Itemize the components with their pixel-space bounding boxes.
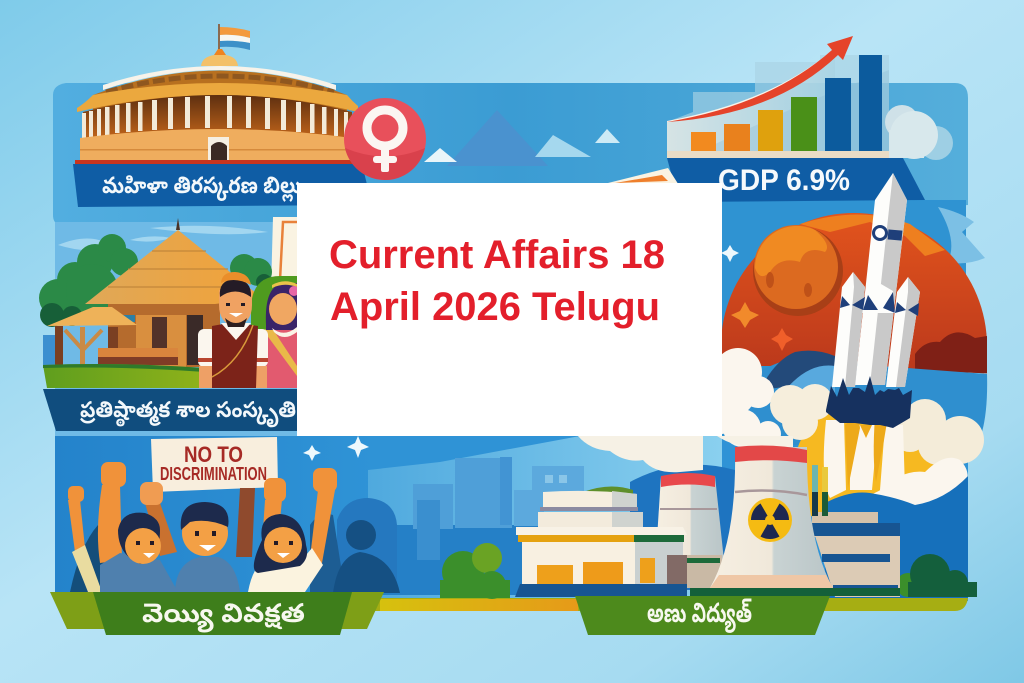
illustration: tribal hut [39,218,272,388]
large cooling tower [710,446,833,588]
right person [248,514,323,592]
center person [175,502,240,592]
banner: women reservation heading: మహిళా తిరస్కరణ బిల్లు [102,172,302,202]
left person [72,513,178,592]
clouds [708,348,984,465]
smoke plume [578,436,793,472]
sparkles [303,245,947,528]
hut body [108,302,220,367]
main thatched roof [85,230,262,304]
bar chart: GDP [667,36,900,158]
small cooling tower [655,473,725,570]
title card [297,183,722,436]
main body [855,173,907,385]
reactor building [515,486,722,597]
icon: flag [220,27,250,50]
ground [43,364,205,388]
icon: female symbol [344,98,426,180]
illustration: nuclear plant [375,436,977,611]
cloud near chart [885,105,953,160]
blue wave [825,476,968,598]
exhaust flames [824,413,905,498]
illustration: mars and rocket scene [708,173,987,598]
background silhouettes [70,498,400,593]
banner: GDP 6.9%: GDP 6.9% [718,164,850,197]
rocket [826,173,920,428]
icon: parliament building [75,24,358,165]
sun [794,400,934,540]
planet [753,225,843,316]
panel: top band [53,83,968,224]
left booster [832,272,865,387]
protest sign: DISCRIMINATION [160,463,267,484]
banner: tribal culture heading [43,389,300,431]
right booster [886,277,920,387]
banner: left green [50,592,384,635]
growth arrow [667,36,853,122]
chart bars [691,55,882,151]
city skyline [413,457,584,560]
banner: right green [575,596,830,635]
banner: right green: అణు విద్యుత్ [647,598,752,633]
illustration: tribal couple [198,272,299,388]
document behind title [271,168,682,290]
side veranda [47,307,137,326]
nose of centre core [860,284,895,313]
icon: radiation symbol [748,498,792,542]
panel: middle sky [43,200,985,440]
main building [812,512,900,597]
ground strip [375,598,968,611]
lower white cloud [865,458,968,506]
left trees [440,543,510,599]
panel: bottom band [55,436,968,601]
title card: April 2026 Telugu [330,285,660,329]
raised arms [68,462,337,563]
banner: GDP 6.9% [667,158,925,202]
blue hills [722,351,987,445]
right trees [896,554,977,597]
mars disc [722,213,987,374]
banner: tribal culture heading: ప్రతిష్ఠాత్మక శాల సంస్కృతి [80,397,296,428]
protest sign: NO TO [184,442,243,467]
title text: Current Affairs 18 [329,233,665,277]
stars [731,302,793,351]
banner: left green: వెయ్యి వివక్షత [142,598,305,633]
navy engine base [826,376,912,428]
woman [251,276,299,388]
banner: women reservation heading [73,164,372,207]
trees [39,234,272,327]
protest sign [151,437,278,492]
chimneys [812,465,828,516]
man [198,272,268,388]
illustration: protesters [68,437,400,593]
